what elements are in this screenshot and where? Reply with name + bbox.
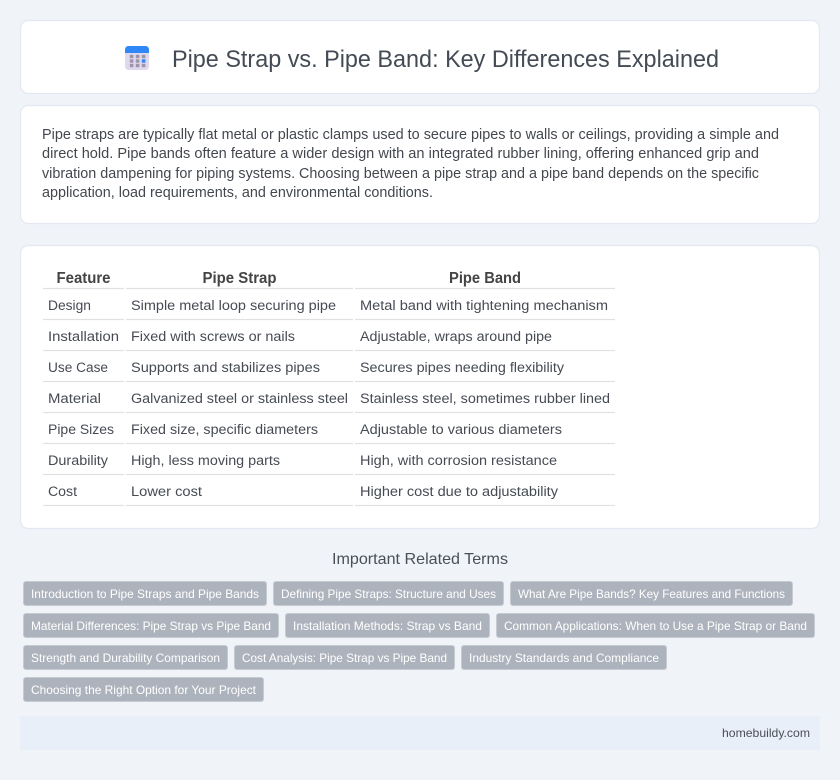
table header <box>56 270 521 287</box>
row: cost: Lower cost <box>131 484 202 500</box>
tag: Defining Pipe Straps: Structure and Uses <box>281 587 496 601</box>
panel: introduction <box>20 106 820 224</box>
row: material: Material <box>48 391 101 407</box>
footer: homebuildy.com <box>722 726 810 740</box>
row: material: Stainless steel, sometimes rubber lined <box>360 391 610 407</box>
row: material <box>48 391 610 407</box>
row: design: Design <box>48 298 91 314</box>
row: use case: Secures pipes needing flexibility <box>360 360 565 376</box>
tag <box>24 614 278 638</box>
tag <box>286 614 490 638</box>
row: durability: High, with corrosion resistance <box>360 453 557 469</box>
row: pipe sizes <box>48 422 562 438</box>
row: durability <box>48 453 557 469</box>
tag <box>24 582 266 606</box>
tag <box>510 582 792 606</box>
row: cost: Cost <box>48 484 77 500</box>
panel: comparison table <box>20 246 820 528</box>
row: design: Simple metal loop securing pipe <box>131 298 336 314</box>
tag <box>496 614 814 638</box>
tag <box>274 582 504 606</box>
row: installation: Installation <box>48 329 119 345</box>
row: use case <box>48 360 565 376</box>
row: cost: Higher cost due to adjustability <box>360 484 559 500</box>
row: durability: High, less moving parts <box>131 453 280 469</box>
row: design <box>48 298 608 314</box>
panel: header <box>20 20 820 94</box>
tag: Material Differences: Pipe Strap vs Pipe Band <box>31 619 271 633</box>
row: material: Galvanized steel or stainless steel <box>131 391 348 407</box>
tag <box>24 646 228 670</box>
footer <box>20 716 820 750</box>
tag: Common Applications: When to Use a Pipe Strap or Band <box>504 619 807 633</box>
row: installation: Fixed with screws or nails <box>131 329 295 345</box>
row: use case: Supports and stabilizes pipes <box>131 360 320 376</box>
tag: Cost Analysis: Pipe Strap vs Pipe Band <box>242 651 447 665</box>
tag <box>234 646 454 670</box>
intro text <box>42 127 779 201</box>
row: pipe sizes: Fixed size, specific diameters <box>131 422 318 438</box>
title: Pipe Strap vs. Pipe Band: Key Differences Explained <box>172 46 719 73</box>
row: pipe sizes: Adjustable to various diameters <box>360 422 562 438</box>
row: cost <box>48 484 559 500</box>
row: design: Metal band with tightening mechanism <box>360 298 608 314</box>
tag: Installation Methods: Strap vs Band <box>293 619 482 633</box>
icon: calendar <box>125 46 149 70</box>
table header: Pipe Strap <box>202 270 277 287</box>
intro text: Pipe straps are typically flat metal or plastic clamps used to secure pipes to walls or ceilings, providing a simple and <box>42 127 779 143</box>
tag <box>462 646 666 670</box>
tag: Industry Standards and Compliance <box>469 651 659 665</box>
tag: Strength and Durability Comparison <box>31 651 220 665</box>
row: installation <box>48 329 552 345</box>
tag <box>24 678 264 702</box>
row: pipe sizes: Pipe Sizes <box>48 422 114 438</box>
row: installation: Adjustable, wraps around pipe <box>360 329 552 345</box>
row: durability: Durability <box>48 453 109 469</box>
row: use case: Use Case <box>48 360 108 376</box>
table header: Feature <box>56 270 111 287</box>
tag: What Are Pipe Bands? Key Features and Functions <box>518 587 785 601</box>
tag: Choosing the Right Option for Your Project <box>31 683 257 697</box>
intro text: vibration dampening for piping systems. Choosing between a pipe strap and a pipe band depends on the specific <box>42 166 759 182</box>
heading: related terms: Important Related Terms <box>332 551 508 568</box>
related terms tags <box>24 582 814 702</box>
tag: Introduction to Pipe Straps and Pipe Bands <box>31 587 259 601</box>
intro text: direct hold. Pipe bands often feature a wider design with an integrated rubber lining, offering enhanced grip and <box>42 146 759 162</box>
table header: Pipe Band <box>449 270 521 287</box>
intro text: application, load requirements, and environmental conditions. <box>42 185 433 201</box>
